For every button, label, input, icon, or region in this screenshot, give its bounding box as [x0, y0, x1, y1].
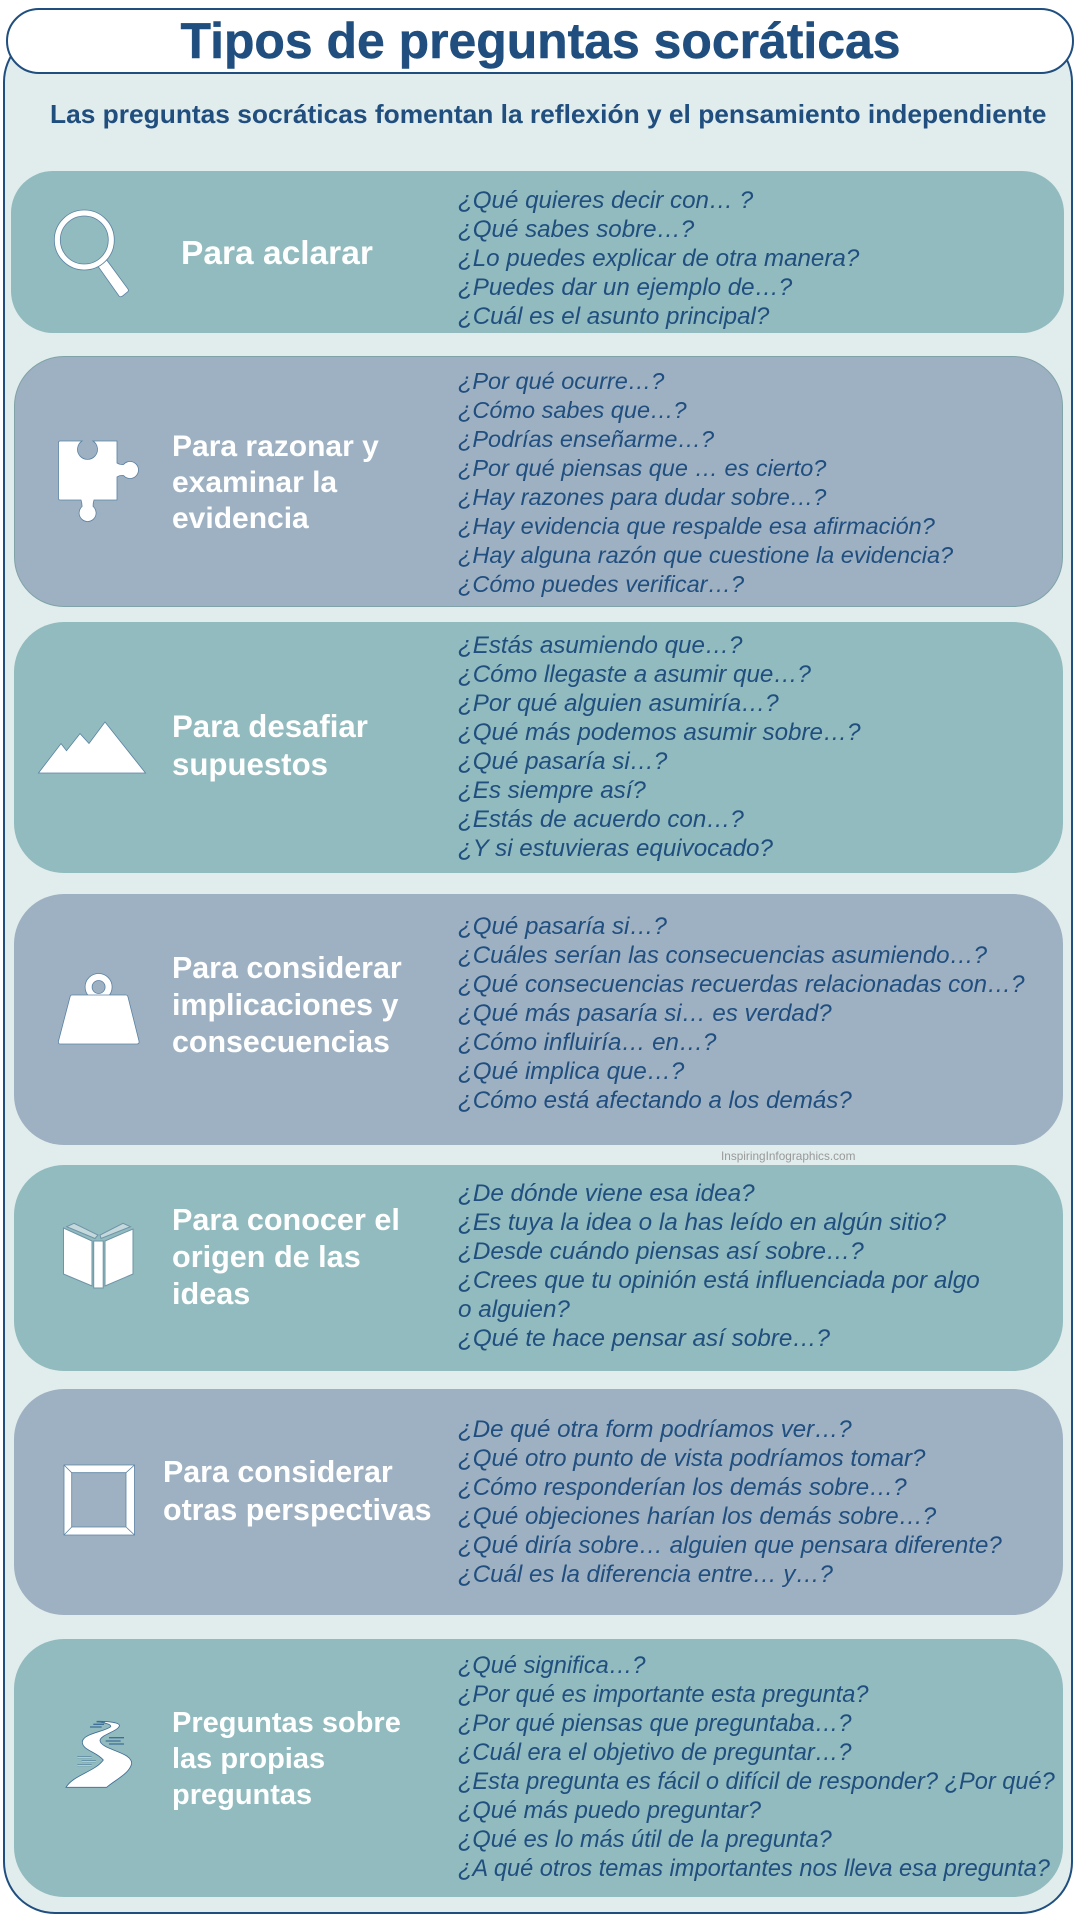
icon: magnifying glass	[54, 210, 128, 297]
heading: para aclarar: Para aclarar	[181, 235, 373, 272]
questions: para razonar: ¿Hay evidencia que respalde esa afirmación?	[458, 513, 935, 539]
questions: origen de las ideas: ¿Qué te hace pensar así sobre…?	[458, 1325, 830, 1352]
questions: para razonar: ¿Podrías enseñarme…?	[458, 426, 714, 452]
heading: otras perspectivas	[163, 1455, 432, 1526]
questions: otras perspectivas: ¿Qué diría sobre… alguien que pensara diferente?	[458, 1532, 1002, 1559]
title banner	[6, 8, 1074, 74]
heading: para razonar	[172, 430, 379, 535]
questions: otras perspectivas: ¿Qué objeciones harían los demás sobre…?	[458, 1503, 936, 1530]
questions: para razonar: ¿Cómo puedes verificar…?	[458, 571, 744, 597]
questions: otras perspectivas	[458, 1416, 1002, 1588]
questions: sobre las propias preguntas: ¿Qué significa…?	[458, 1653, 646, 1679]
questions: para considerar implicaciones: ¿Cómo influiría… en…?	[458, 1029, 716, 1056]
questions: para aclarar: ¿Qué quieres decir con… ?	[458, 187, 753, 214]
questions: para desafiar: ¿Estás de acuerdo con…?	[458, 806, 744, 833]
questions: sobre las propias preguntas	[458, 1653, 1055, 1882]
questions: para desafiar: ¿Qué más podemos asumir sobre…?	[458, 719, 861, 746]
questions: para razonar: ¿Hay razones para dudar sobre…?	[458, 484, 826, 510]
questions: para desafiar: ¿Es siempre así?	[458, 777, 646, 804]
panel: otras perspectivas	[14, 1389, 1063, 1615]
questions: para desafiar: ¿Qué pasaría si…?	[458, 748, 667, 775]
questions: origen de las ideas: ¿Crees que tu opinión está influenciada por algo	[458, 1267, 980, 1294]
questions: para desafiar: ¿Y si estuvieras equivocado?	[458, 835, 773, 862]
panel: origen de las ideas	[14, 1165, 1063, 1371]
heading: para considerar implicaciones: consecuencias	[172, 1025, 390, 1059]
heading: para razonar: evidencia	[172, 502, 309, 535]
questions: para considerar implicaciones: ¿Cómo está afectando a los demás?	[458, 1087, 852, 1114]
panel: sobre las propias preguntas	[14, 1639, 1063, 1897]
icon: mountains	[38, 722, 146, 773]
icon: puzzle piece	[58, 441, 138, 521]
questions: para razonar: ¿Por qué ocurre…?	[458, 368, 664, 394]
questions: sobre las propias preguntas: ¿Qué es lo más útil de la pregunta?	[458, 1827, 832, 1853]
questions: para desafiar	[458, 632, 861, 862]
heading: origen de las ideas: Para conocer el	[172, 1203, 400, 1237]
questions: sobre las propias preguntas: ¿Qué más puedo preguntar?	[458, 1798, 761, 1824]
heading: para desafiar	[172, 709, 368, 782]
questions: para considerar implicaciones	[458, 913, 1025, 1114]
panel: para desafiar	[14, 622, 1063, 873]
questions: para considerar implicaciones: ¿Qué pasaría si…?	[458, 913, 667, 940]
questions: para considerar implicaciones: ¿Qué más pasaría si… es verdad?	[458, 1000, 832, 1027]
heading: para desafiar: supuestos	[172, 746, 328, 782]
questions: para considerar implicaciones: ¿Qué consecuencias recuerdas relacionadas con…?	[458, 971, 1025, 998]
questions: para aclarar	[458, 187, 860, 330]
panel: para considerar implicaciones	[14, 894, 1063, 1145]
questions: para aclarar: ¿Qué sabes sobre…?	[458, 216, 694, 243]
heading: origen de las ideas: ideas	[172, 1277, 250, 1311]
heading: otras perspectivas: otras perspectivas	[163, 1492, 432, 1526]
questions: para aclarar: ¿Puedes dar un ejemplo de…?	[458, 274, 792, 301]
watermark: InspiringInfographics.com	[721, 1149, 855, 1163]
heading: para razonar: examinar la	[172, 466, 337, 499]
questions: otras perspectivas: ¿Qué otro punto de vista podríamos tomar?	[458, 1445, 925, 1472]
questions: origen de las ideas: ¿De dónde viene esa idea?	[458, 1180, 755, 1207]
heading: para desafiar: Para desafiar	[172, 709, 368, 744]
subtitle: Las preguntas socráticas fomentan la reflexión y el pensamiento independiente	[50, 99, 1046, 129]
icon: open book	[64, 1223, 133, 1288]
questions: para razonar: ¿Por qué piensas que … es cierto?	[458, 455, 826, 481]
heading: origen de las ideas	[172, 1203, 400, 1311]
heading: sobre las propias preguntas: las propias	[172, 1743, 325, 1775]
questions: sobre las propias preguntas: ¿Esta pregunta es fácil o difícil de responder? ¿Por qué?	[458, 1769, 1055, 1795]
panel: para aclarar	[11, 171, 1064, 333]
questions: para aclarar: ¿Lo puedes explicar de otra manera?	[458, 245, 859, 272]
questions: para desafiar: ¿Cómo llegaste a asumir que…?	[458, 661, 811, 688]
heading: sobre las propias preguntas: Preguntas sobre	[172, 1707, 401, 1739]
questions: sobre las propias preguntas: ¿Cuál era el objetivo de preguntar…?	[458, 1740, 851, 1766]
icon: weight	[58, 974, 139, 1044]
questions: otras perspectivas: ¿De qué otra form podríamos ver…?	[458, 1416, 852, 1443]
questions: sobre las propias preguntas: ¿Por qué piensas que preguntaba…?	[458, 1711, 852, 1737]
heading: para considerar implicaciones	[172, 951, 402, 1059]
heading: para considerar implicaciones: implicaciones y	[172, 988, 398, 1022]
heading: para razonar: Para razonar y	[172, 430, 379, 463]
questions: para razonar: ¿Cómo sabes que…?	[458, 397, 687, 423]
icon: winding road	[66, 1721, 132, 1787]
panel: para razonar	[14, 356, 1063, 607]
icon: picture frame	[64, 1465, 134, 1535]
questions: para desafiar: ¿Por qué alguien asumiría…?	[458, 690, 779, 717]
questions: para desafiar: ¿Estás asumiendo que…?	[458, 632, 742, 659]
heading: sobre las propias preguntas	[172, 1707, 401, 1811]
questions: sobre las propias preguntas: ¿Por qué es importante esta pregunta?	[458, 1682, 869, 1708]
questions: otras perspectivas: ¿Cuál es la diferencia entre… y…?	[458, 1561, 833, 1588]
questions: para razonar: ¿Hay alguna razón que cuestione la evidencia?	[458, 542, 953, 568]
questions: para considerar implicaciones: ¿Qué implica que…?	[458, 1058, 684, 1085]
heading: sobre las propias preguntas: preguntas	[172, 1779, 312, 1811]
questions: origen de las ideas: ¿Es tuya la idea o la has leído en algún sitio?	[458, 1209, 946, 1236]
questions: para razonar	[458, 368, 953, 597]
title: Tipos de preguntas socráticas	[181, 13, 900, 69]
heading: otras perspectivas: Para considerar	[163, 1455, 393, 1489]
questions: para considerar implicaciones: ¿Cuáles serían las consecuencias asumiendo…?	[458, 942, 987, 969]
heading: origen de las ideas: origen de las	[172, 1240, 361, 1274]
questions: origen de las ideas: ¿Desde cuándo piensas así sobre…?	[458, 1238, 864, 1265]
questions: otras perspectivas: ¿Cómo responderían los demás sobre…?	[458, 1474, 907, 1501]
questions: origen de las ideas	[458, 1180, 980, 1352]
questions: sobre las propias preguntas: ¿A qué otros temas importantes nos lleva esa pregunta?	[458, 1856, 1050, 1882]
questions: origen de las ideas: o alguien?	[458, 1296, 570, 1323]
heading: para considerar implicaciones: Para considerar	[172, 951, 402, 985]
questions: para aclarar: ¿Cuál es el asunto principal?	[458, 303, 769, 330]
